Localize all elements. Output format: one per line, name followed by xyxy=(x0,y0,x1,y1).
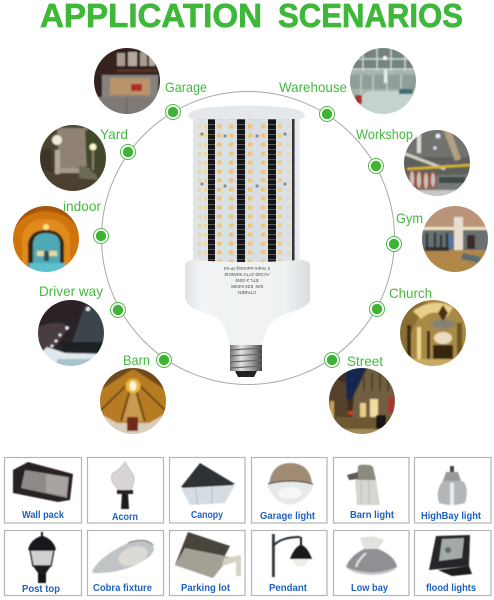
card: wall pack xyxy=(4,458,82,523)
card: parking lot: Parking lot xyxy=(181,582,230,594)
card: post top xyxy=(4,530,82,596)
title xyxy=(40,0,463,34)
card: flood lights: flood lights xyxy=(426,582,476,594)
ring markers xyxy=(94,104,402,368)
card: acorn xyxy=(88,458,164,523)
base print: CTABEN xyxy=(238,290,256,295)
photo: warehouse xyxy=(349,47,417,115)
card: barn light xyxy=(334,458,409,523)
corn LED bulb xyxy=(185,106,310,377)
screw socket xyxy=(230,345,262,377)
scenario labels: Workshop xyxy=(356,126,413,142)
bulb base xyxy=(185,260,310,345)
scenario labels: indoor xyxy=(63,198,101,214)
scenario labels: Yard xyxy=(100,126,128,142)
card: pendant xyxy=(252,530,327,596)
bulb body with LED strips xyxy=(193,116,300,264)
panel: fixture types xyxy=(4,458,491,596)
card: cobra fixture xyxy=(88,530,164,596)
base print: AC100-277V 50/60HZ xyxy=(224,272,270,277)
card: parking lot xyxy=(170,530,245,596)
card: post top: Post top xyxy=(22,583,60,595)
photo: gym xyxy=(421,205,489,274)
scenario labels: Warehouse xyxy=(279,79,347,95)
scenario labels: Church xyxy=(389,285,432,301)
photo: workshop xyxy=(403,129,471,197)
photo: yard xyxy=(39,124,107,192)
card: barn light: Barn light xyxy=(350,509,394,521)
photo: driver way xyxy=(37,299,105,367)
base print: ETL 2-30W xyxy=(235,278,259,283)
card: flood lights xyxy=(414,530,491,596)
photo: street xyxy=(328,367,396,435)
bulb top cap xyxy=(188,106,305,119)
scenario labels: Gym xyxy=(396,210,423,226)
scenario labels: Garage xyxy=(165,79,207,95)
photo: church xyxy=(399,299,467,367)
photo: barn xyxy=(99,367,167,435)
card: cobra fixture: Cobra fixture xyxy=(93,582,152,594)
base print xyxy=(223,266,270,295)
base print: 3 Years warranty IP-64 xyxy=(223,266,270,271)
card: garage light: Garage light xyxy=(260,510,315,522)
card: canopy: Canopy xyxy=(191,509,223,521)
base print: S/N: E26 5400K xyxy=(230,284,263,289)
card: highbay light: HighBay light xyxy=(421,510,481,522)
scenario labels xyxy=(39,79,432,369)
scenario labels: Driver way xyxy=(39,283,103,299)
scenario labels: Street xyxy=(347,353,383,369)
card: low bay xyxy=(334,530,409,596)
card: highbay light xyxy=(414,458,491,523)
card: low bay: Low bay xyxy=(351,582,388,594)
card: acorn: Acorn xyxy=(112,511,138,523)
photo: indoor xyxy=(12,205,80,273)
ring connecting the scenarios xyxy=(102,92,394,384)
card: garage light xyxy=(252,458,327,523)
photo: garage xyxy=(93,47,161,116)
card: wall pack: Wall pack xyxy=(22,509,64,521)
scenario labels: Barn xyxy=(123,352,150,368)
card: pendant: Pendant xyxy=(269,582,307,594)
card: canopy xyxy=(170,458,245,523)
